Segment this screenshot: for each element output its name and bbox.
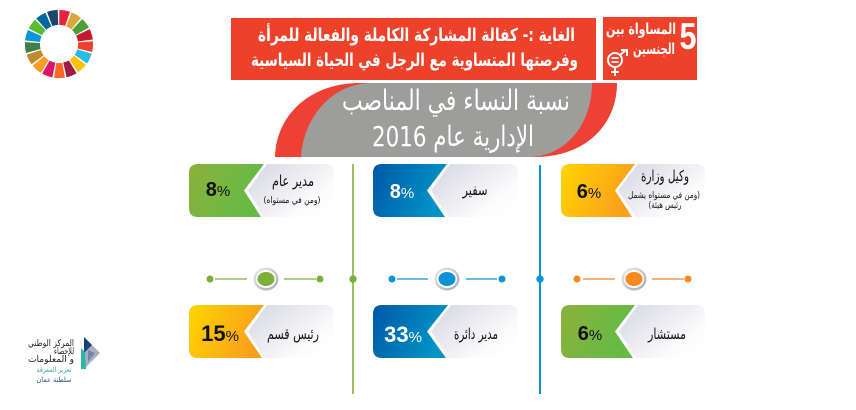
icon: gender equality symbol <box>608 50 627 76</box>
note: (ومن في مستواه) <box>264 196 320 206</box>
text: goal name line 1: المساواة بين <box>606 20 676 38</box>
divider: blue vertical line <box>536 165 544 394</box>
logo: national centre for statistics and information <box>28 337 100 384</box>
label: رئيس قسم <box>267 325 319 343</box>
label: مدير عام <box>272 172 314 190</box>
value: 15% <box>201 321 239 346</box>
panel: main title banner <box>275 83 617 157</box>
value: 6% <box>577 181 601 203</box>
card: adviser 6% <box>561 305 705 358</box>
text: title line 2: الإدارية عام 2016 <box>372 120 534 153</box>
label: مستشار <box>647 325 686 343</box>
value: 8% <box>206 179 230 201</box>
text: target line 2: وفرصتها المتساوية مع الرجل في الحياة السياسية <box>251 50 578 71</box>
card: department director 33% <box>373 305 518 358</box>
value: 33% <box>384 322 422 347</box>
panel: target statement <box>231 18 596 80</box>
panel: goal 5 gender equality <box>603 16 697 80</box>
text: title line 1: نسبة النساء في المناصب <box>342 84 570 117</box>
logo tagline: تعزيز المعرفة <box>36 366 72 374</box>
logo name line 2: للإحصاء <box>54 347 74 357</box>
text: target line 1: الغاية :- كفالة المشاركة الكاملة والفعالة للمرأة <box>258 23 575 46</box>
label: وكيل وزارة <box>641 167 689 185</box>
value: 8% <box>390 181 414 203</box>
text: goal number: 5 <box>680 16 696 57</box>
logo name line 1: المركز الوطني <box>28 339 74 349</box>
logo mark <box>81 337 100 369</box>
label: مدير دائرة <box>454 325 498 343</box>
logo country: سلطنة عمان <box>36 376 72 384</box>
card: section head 15% <box>189 305 334 358</box>
label: سفير <box>462 181 488 199</box>
note line 2: رئيس هيئة) <box>648 201 682 211</box>
text: goal name line 2: الجنسين <box>633 40 675 58</box>
card: undersecretary 6% <box>561 164 705 217</box>
logo name line 3: و المعلومات <box>28 355 74 365</box>
note line 1: (ومن في مستواه يشمل <box>628 191 700 201</box>
divider: green vertical line <box>349 164 357 394</box>
icon: SDG colour wheel <box>21 6 97 82</box>
connector: blue <box>388 268 506 290</box>
connector: green <box>206 268 324 290</box>
card: ambassador 8% <box>373 164 518 217</box>
connector: orange <box>574 268 692 290</box>
card: director general 8% <box>189 164 334 217</box>
value: 6% <box>578 323 602 345</box>
